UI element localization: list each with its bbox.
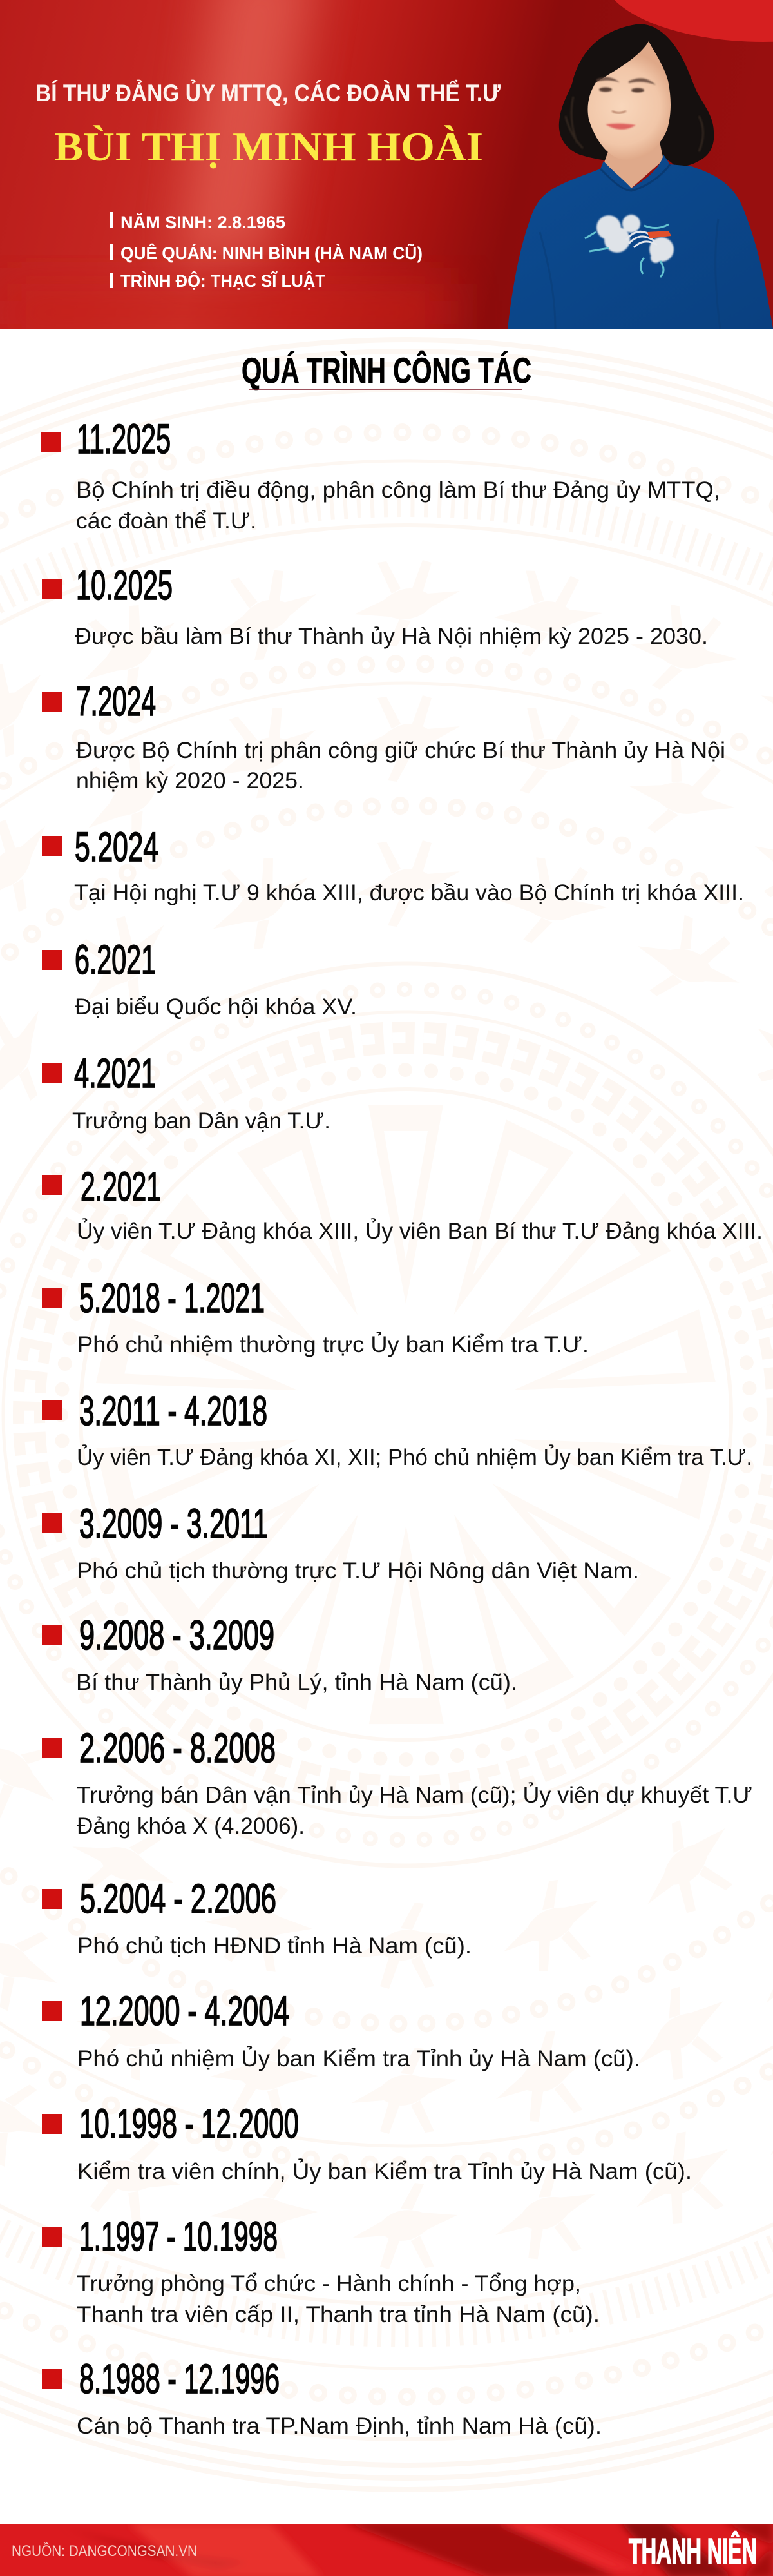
timeline: 9.2008 - 3.2009: 9.2008 - 3.2009	[79, 1612, 274, 1658]
timeline: 3.2011 - 4.2018	[42, 1388, 752, 1470]
timeline: 4.2021: 4.2021	[74, 1050, 156, 1096]
info: hometown: QUÊ QUÁN: NINH BÌNH (HÀ NAM CŨ)	[120, 243, 423, 263]
section heading: QUÁ TRÌNH CÔNG TÁC	[242, 350, 531, 391]
timeline: 8.1988 - 12.1996: 8.1988 - 12.1996	[79, 2356, 280, 2402]
info: birth date: NĂM SINH: 2.8.1965	[120, 212, 285, 232]
timeline: 5.2024	[42, 824, 744, 905]
timeline: 7.2024: 7.2024	[76, 678, 156, 724]
timeline: 5.2024: Tại Hội nghị T.Ư 9 khóa XIII, được bầu vào Bộ Chính trị khóa XIII.	[74, 880, 744, 905]
timeline: 9.2008 - 3.2009: Bí thư Thành ủy Phủ Lý, tỉnh Hà Nam (cũ).	[76, 1669, 517, 1695]
timeline: 5.2018 - 1.2021	[42, 1275, 589, 1357]
timeline: 9.2008 - 3.2009	[42, 1612, 517, 1695]
timeline: 2.2021: Ủy viên T.Ư Đảng khóa XIII, Ủy viên Ban Bí thư T.Ư Đảng khóa XIII.	[77, 1218, 763, 1244]
timeline: 1.1997 - 10.1998: Thanh tra viên cấp II, Thanh tra tỉnh Hà Nam (cũ).	[77, 2301, 600, 2327]
timeline: 6.2021	[42, 936, 357, 1020]
timeline: 11.2025: Bộ Chính trị điều động, phân công làm Bí thư Đảng ủy MTTQ,	[76, 477, 720, 503]
timeline: 5.2018 - 1.2021: 5.2018 - 1.2021	[79, 1275, 265, 1321]
timeline: 2.2006 - 8.2008: Trưởng bán Dân vận Tỉnh ủy Hà Nam (cũ); Ủy viên dự khuyết T.Ư	[77, 1782, 752, 1808]
timeline: 7.2024: Được Bộ Chính trị phân công giữ chức Bí thư Thành ủy Hà Nội	[76, 737, 725, 763]
panel: footer flag band	[0, 2520, 773, 2576]
timeline: 2.2006 - 8.2008: 2.2006 - 8.2008	[79, 1725, 276, 1771]
timeline: 10.2025: Được bầu làm Bí thư Thành ủy Hà Nội nhiệm kỳ 2025 - 2030.	[75, 623, 708, 649]
timeline: 5.2004 - 2.2006: 5.2004 - 2.2006	[80, 1875, 276, 1922]
name heading: BÙI THỊ MINH HOÀI	[54, 124, 483, 169]
timeline: 5.2024: 5.2024	[75, 824, 158, 870]
timeline: 7.2024: nhiệm kỳ 2020 - 2025.	[76, 768, 304, 793]
timeline: 11.2025: các đoàn thể T.Ư.	[76, 508, 256, 534]
timeline: 8.1988 - 12.1996	[42, 2356, 602, 2439]
timeline: 6.2021: Đại biểu Quốc hội khóa XV.	[75, 994, 357, 1020]
timeline: 5.2004 - 2.2006	[42, 1875, 472, 1959]
timeline: 6.2021: 6.2021	[75, 936, 156, 983]
timeline: 3.2009 - 3.2011: 3.2009 - 3.2011	[79, 1500, 268, 1547]
timeline: 5.2004 - 2.2006: Phó chủ tịch HĐND tỉnh Hà Nam (cũ).	[77, 1933, 472, 1959]
timeline: 7.2024	[42, 678, 725, 793]
timeline: 1.1997 - 10.1998	[42, 2213, 600, 2327]
timeline: 10.1998 - 12.2000	[42, 2100, 692, 2184]
timeline: 2.2021	[42, 1163, 763, 1244]
timeline: 10.2025: 10.2025	[76, 562, 173, 608]
source credit: NGUỒN: DANGCONGSAN.VN	[12, 2542, 197, 2560]
timeline: 3.2011 - 4.2018: 3.2011 - 4.2018	[79, 1388, 267, 1434]
timeline: 11.2025: 11.2025	[77, 416, 171, 462]
timeline: 12.2000 - 4.2004	[42, 1988, 640, 2071]
timeline: 2.2006 - 8.2008: Đảng khóa X (4.2006).	[77, 1813, 305, 1839]
info: education: TRÌNH ĐỘ: THẠC SĨ LUẬT	[120, 271, 325, 291]
timeline: 4.2021: Trưởng ban Dân vận T.Ư.	[72, 1108, 330, 1134]
portrait: woman in blue ao dai	[508, 24, 773, 329]
timeline: 2.2006 - 8.2008	[42, 1725, 752, 1839]
timeline: 11.2025	[41, 416, 720, 534]
timeline: 1.1997 - 10.1998: 1.1997 - 10.1998	[79, 2213, 278, 2260]
timeline: 2.2021: 2.2021	[81, 1163, 161, 1210]
timeline: 12.2000 - 4.2004: Phó chủ nhiệm Ủy ban Kiểm tra Tỉnh ủy Hà Nam (cũ).	[77, 2046, 640, 2071]
timeline: 4.2021	[42, 1050, 330, 1134]
timeline: 3.2009 - 3.2011: Phó chủ tịch thường trực T.Ư Hội Nông dân Việt Nam.	[77, 1558, 639, 1583]
timeline: 10.2025	[42, 562, 708, 649]
timeline: 12.2000 - 4.2004: 12.2000 - 4.2004	[80, 1988, 289, 2034]
timeline: 3.2009 - 3.2011	[42, 1500, 639, 1583]
timeline: 1.1997 - 10.1998: Trưởng phòng Tổ chức - Hành chính - Tổng hợp,	[77, 2271, 581, 2296]
timeline: 3.2011 - 4.2018: Ủy viên T.Ư Đảng khóa XI, XII; Phó chủ nhiệm Ủy ban Kiểm tra T.Ư.	[77, 1444, 752, 1470]
timeline: 8.1988 - 12.1996: Cán bộ Thanh tra TP.Nam Định, tỉnh Nam Hà (cũ).	[77, 2413, 602, 2439]
timeline: 5.2018 - 1.2021: Phó chủ nhiệm thường trực Ủy ban Kiểm tra T.Ư.	[77, 1332, 589, 1357]
panel: header banner	[0, 0, 773, 342]
timeline: 10.1998 - 12.2000: Kiểm tra viên chính, Ủy ban Kiểm tra Tỉnh ủy Hà Nam (cũ).	[77, 2158, 692, 2184]
timeline: 10.1998 - 12.2000: 10.1998 - 12.2000	[79, 2100, 299, 2147]
title: BÍ THƯ ĐẢNG ỦY MTTQ, CÁC ĐOÀN THỂ T.Ư	[35, 79, 501, 106]
